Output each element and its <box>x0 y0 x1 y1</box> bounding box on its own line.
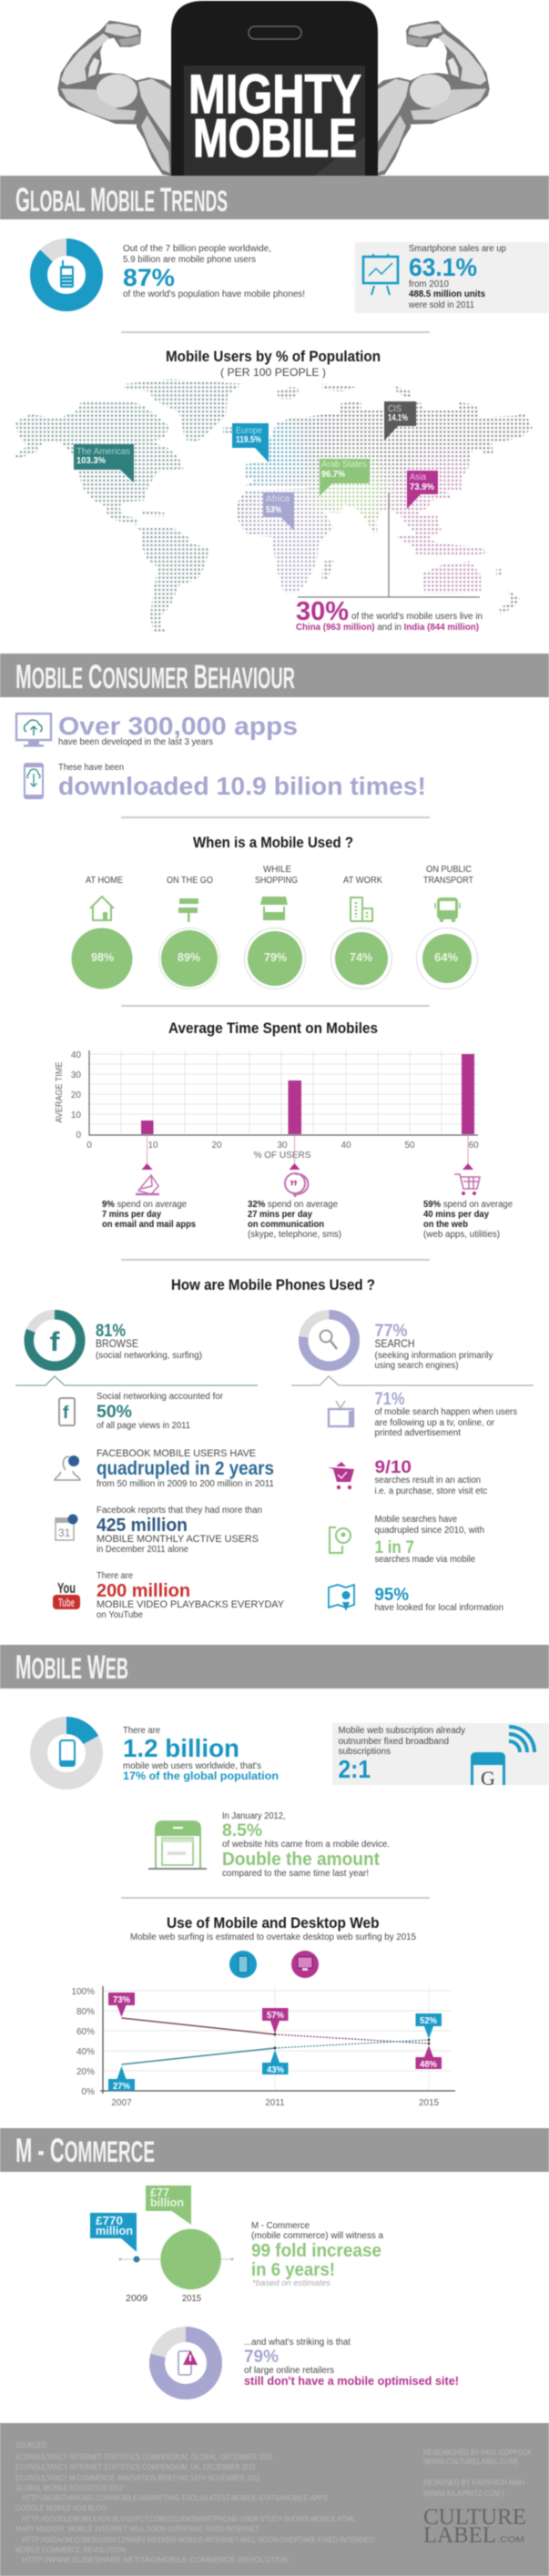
heading: use of mobile and desktop web <box>130 1914 416 1942</box>
title <box>188 64 361 168</box>
callout: Asia: 73.9% <box>410 482 434 492</box>
heading: use of mobile and desktop web: Mobile web surfing is estimated to overtake desktop web surfing by 2015 <box>130 1932 416 1942</box>
panel: usage locations <box>71 864 477 989</box>
callout: CIS <box>384 401 416 441</box>
timeline: 2009 <box>126 2293 147 2304</box>
callout: Arab States: Arab States <box>321 460 367 470</box>
x axis labels: 2015 <box>419 2098 440 2108</box>
icon: presentation chart <box>363 254 398 295</box>
stat text: of website hits came from a mobile device. <box>222 1840 390 1850</box>
icon: left flexed arm <box>57 21 171 176</box>
callout: 77 billion: billion <box>150 2196 184 2209</box>
y axis labels: 80% <box>76 2007 95 2017</box>
stat text: compared to the same time last year! <box>222 1869 369 1879</box>
caption: 32% spend on average <box>248 1200 338 1210</box>
column: on public transport: TRANSPORT <box>423 875 473 886</box>
item: 1 in 7 searches: quadrupled since 2010, with <box>375 1526 484 1536</box>
y axis labels: 20 <box>71 1090 81 1100</box>
sources list: SOURCES: <box>15 2441 47 2449</box>
dotted world map <box>15 379 534 633</box>
icon: shopping cart <box>454 1174 480 1195</box>
stat text: 488.5 million units <box>409 289 485 299</box>
item: 95% local information <box>329 1585 503 1613</box>
sources list: ECONSULTANCY INTERNET STATISTICS COMPENDIUM, UK, DECEMBER 2011 <box>15 2463 256 2471</box>
item: 71% tv: 71% <box>375 1390 405 1409</box>
caption: (web apps, utilities) <box>423 1230 500 1240</box>
caption: 40 mins per day <box>423 1210 489 1220</box>
credits: RESEARCHED BY PAUL COPPOCK <box>423 2449 533 2457</box>
panel: email usage <box>102 1136 196 1230</box>
stat text: were sold in 2011 <box>408 300 474 310</box>
y axis labels: 100% <box>71 1987 95 1997</box>
caption <box>248 1200 341 1240</box>
callout: 73%: 73% <box>113 1995 130 2005</box>
stat text: In January 2012, <box>222 1811 286 1821</box>
donut chart: 79% <box>157 2334 215 2392</box>
stat text: 17% of the global population <box>123 1771 279 1782</box>
x axis labels: 2007 <box>111 2098 132 2108</box>
column: while shopping <box>244 864 306 989</box>
phone body <box>171 1 378 176</box>
credits <box>423 2449 533 2498</box>
footer <box>0 2423 549 2576</box>
caption: on the web <box>423 1220 468 1230</box>
stat text: There are <box>123 1726 160 1736</box>
item: 425 million: MOBILE MONTHLY ACTIVE USERS <box>97 1534 259 1545</box>
callout: 57% <box>262 2008 288 2033</box>
column: while shopping: SHOPPING <box>255 875 298 886</box>
panel: web usage <box>423 1136 513 1240</box>
heading: use of mobile and desktop web: Use of Mobile and Desktop Web <box>167 1914 379 1932</box>
item: 1 in 7 searches: searches made via mobile <box>375 1555 475 1565</box>
callout: Europe: Europe <box>236 426 262 436</box>
callout: The Americas: The Americas <box>76 447 130 457</box>
caption: 59% spend on average <box>423 1200 513 1210</box>
callout: Arab States <box>320 459 370 496</box>
item: 200 million youtube: 200 million <box>97 1581 190 1601</box>
item: 425 million: Facebook reports that they had more than <box>97 1506 262 1516</box>
stat: browse <box>96 1322 202 1361</box>
stat text: outnumber fixed broadband <box>339 1737 449 1747</box>
stat: search: SEARCH <box>375 1337 415 1350</box>
stat text: ...and what's striking is that <box>244 2338 351 2348</box>
donut chart: 81% browse: f <box>49 1327 61 1357</box>
column: on public transport <box>417 864 477 989</box>
stat text: 8.5% <box>222 1821 262 1841</box>
y axis labels: 10 <box>71 1111 81 1121</box>
caption: 7 mins per day <box>102 1210 161 1220</box>
sources list <box>15 2441 376 2564</box>
credits: DESIGNED BY FARSHIDH MAH <box>423 2479 524 2487</box>
column: at work <box>331 875 391 989</box>
panel: 1.2 billion web users <box>38 1726 279 1782</box>
stat text: 63.1% <box>409 253 477 281</box>
stat text: 2:1 <box>339 1755 371 1783</box>
y axis labels: 40 <box>71 1050 81 1060</box>
item: 95% local information: have looked for local information <box>375 1603 503 1613</box>
caption: on communication <box>248 1220 324 1230</box>
item: 71% tv: of mobile search happen when users <box>375 1407 517 1417</box>
callout: Europe: 119.5% <box>236 435 261 445</box>
stat text: Double the amount <box>222 1850 380 1870</box>
column: on the go <box>158 875 220 989</box>
item: 200 million youtube <box>53 1571 285 1620</box>
item: 1 in 7 searches: Mobile searches have <box>375 1515 457 1525</box>
callout: Europe <box>232 423 269 462</box>
callout: 770 million: £770 <box>96 2214 123 2227</box>
callout: Africa <box>263 492 294 531</box>
divider with notch <box>15 1376 258 1385</box>
panel: 79% retailers <box>157 2334 459 2392</box>
bar chart: average time spent on mobiles <box>55 1050 479 1161</box>
callout: 52% <box>415 2013 442 2039</box>
y axis labels <box>71 1987 95 2097</box>
stat text: subscriptions <box>339 1747 391 1757</box>
credits: (WWW.CULTURELABEL.COM) <box>423 2458 518 2466</box>
callout: 48%: 48% <box>420 2060 437 2070</box>
panel: smartphone sales <box>355 242 549 313</box>
stat text: 79% <box>244 2348 279 2367</box>
x axis labels: 0 <box>86 1141 92 1151</box>
x axis labels <box>111 2098 440 2108</box>
panel: communication usage <box>248 1136 341 1240</box>
sources list: ECONSULTANCY INTERNET STATISTICS COMPENDIUM, GLOBAL, DECEMBER 2011 <box>15 2453 273 2461</box>
stat text: in 6 years! <box>251 2260 335 2280</box>
donut chart: 17% <box>38 1726 95 1780</box>
timeline: 2015 <box>182 2293 201 2304</box>
section bar: Mobile Consumer Behaviour <box>0 654 549 697</box>
stat: search <box>375 1322 493 1371</box>
sources list: MOBILE COMMERCE REVOLUTION <box>15 2546 126 2554</box>
stat text: Out of the 7 billion people worldwide, <box>123 244 271 254</box>
callout: 43% <box>262 2050 288 2075</box>
panel: 10.9 billion downloads <box>24 763 426 800</box>
item: quadrupled in 2 years <box>55 1448 274 1489</box>
item: quadrupled in 2 years: quadrupled in 2 years <box>97 1458 274 1479</box>
callout: 43%: 43% <box>267 2065 284 2075</box>
callout: The Americas <box>74 444 134 482</box>
x axis labels: 10 <box>147 1141 158 1151</box>
panel: 8.5% website hits <box>148 1811 390 1879</box>
icon: phone with cloud download <box>24 763 44 799</box>
stat text: (mobile commerce) will witness a <box>251 2231 383 2241</box>
sources list: ECONSULTANCY M-COMMERCE INNOVATION BRIEFING 16TH NOVEMBER 2011 <box>15 2474 260 2482</box>
x axis labels: 60 <box>468 1141 479 1151</box>
section bar: M-Commerce <box>0 2128 549 2172</box>
donut chart: 77% search <box>303 1314 355 1366</box>
stat text <box>222 1811 390 1879</box>
panel: 87% population stat <box>38 244 305 302</box>
item: social networking 50% <box>59 1392 224 1431</box>
bars <box>141 1054 474 1134</box>
x axis labels: 2011 <box>265 2098 285 2108</box>
panel: browse column <box>15 1314 285 1620</box>
callout: CIS: 14.1% <box>388 413 408 423</box>
panel: subscriptions 2:1 <box>332 1723 549 1790</box>
desktop line <box>122 2018 430 2044</box>
item: social networking 50%: 50% <box>97 1403 132 1422</box>
callout: 30% live in China and India: 30% <box>296 597 349 626</box>
callout: 77 billion <box>146 2186 191 2225</box>
callout: 52%: 52% <box>420 2016 437 2026</box>
stat text: still don't have a mobile optimised site! <box>244 2374 459 2388</box>
item: social networking 50%: of all page views in 2011 <box>97 1421 190 1431</box>
callout: 30% live in China and India: of the world's mobile users live in <box>351 612 483 622</box>
item: 71% tv <box>329 1390 517 1438</box>
section bar: M-Commerce: M - COMMERCE <box>15 2132 155 2169</box>
callout: 30% live in China and India: China (963 million) and in India (844 million) <box>296 623 479 633</box>
caption: (skype, telephone, sms) <box>248 1230 341 1240</box>
caption: 27 mins per day <box>248 1210 312 1220</box>
callout: 770 million: million <box>96 2224 133 2237</box>
item: 200 million youtube: MOBILE VIDEO PLAYBACKS EVERYDAY <box>97 1599 285 1610</box>
x axis labels <box>86 1141 479 1161</box>
column: while shopping: WHILE <box>263 864 291 875</box>
caption <box>102 1200 196 1230</box>
icon: desktop legend <box>291 1951 319 1978</box>
sources list: HTTP://MOBITHINKING.COM/MOBILE-MARKETING-TOOLS/LATEST-MOBILE-STATS#MOBILE-APPS <box>22 2494 328 2502</box>
stat text: of large online retailers <box>244 2366 334 2376</box>
panel: 300,000 apps <box>16 712 298 747</box>
column: while shopping: 79% <box>264 950 287 964</box>
callout: Arab States: 96.7% <box>321 470 345 480</box>
column: at work: 74% <box>350 950 372 964</box>
callout: 48% <box>415 2045 442 2070</box>
item: 71% tv: printed advertisement <box>375 1428 461 1438</box>
item: quadrupled in 2 years: FACEBOOK MOBILE USERS HAVE <box>97 1448 256 1459</box>
title: MOBILE <box>193 108 357 168</box>
stat text: Mobile web subscription already <box>339 1726 465 1736</box>
column: at home: 98% <box>91 950 114 964</box>
item: 425 million: in December 2011 alone <box>97 1545 188 1555</box>
stat text: These have been <box>58 763 124 773</box>
callout: 77 billion: £77 <box>150 2186 169 2199</box>
stat text <box>123 244 305 299</box>
stat text: *based on estimates <box>252 2278 330 2288</box>
item: 200 million youtube: There are <box>97 1571 133 1581</box>
heading: how are mobile phones used: How are Mobile Phones Used ? <box>171 1276 375 1293</box>
stat text: 99 fold increase <box>251 2241 381 2261</box>
stat text: Over 300,000 apps <box>58 712 298 740</box>
item: social networking 50%: f <box>63 1404 69 1423</box>
callout: The Americas: 103.3% <box>76 456 106 466</box>
icon: green mobile browser <box>148 1821 207 1870</box>
line chart: mobile vs desktop web <box>71 1986 455 2108</box>
stat: browse: 81% <box>96 1322 126 1341</box>
stat: search: (seeking information primarily <box>375 1351 493 1361</box>
callout: 27%: 27% <box>113 2082 130 2092</box>
item: 1 in 7 searches <box>330 1515 484 1565</box>
y axis labels: 60% <box>76 2027 95 2037</box>
panel: m-commerce growth <box>90 2186 383 2304</box>
column: on public transport: ON PUBLIC <box>426 864 472 875</box>
sources list: MARY MEEKER: MOBILE INTERNET WILL SOON OVERTAKE FIXED INTERNET <box>15 2525 259 2533</box>
icon: wifi phone <box>471 1727 534 1790</box>
section bar: Mobile Web: MOBILE WEB <box>15 1648 128 1686</box>
item: 200 million youtube: You <box>57 1581 76 1597</box>
stat text: 87% <box>123 264 175 291</box>
donut chart: 81% browse <box>29 1314 80 1366</box>
heading: when is a mobile used: When is a Mobile Used ? <box>193 834 353 851</box>
icon: email <box>136 1175 159 1194</box>
sources list: GLOBAL MOBILE STATISTICS 2012 <box>15 2484 123 2492</box>
icon: right flexed arm <box>376 21 490 176</box>
stat: search: 77% <box>375 1322 408 1341</box>
column: on public transport: 64% <box>434 950 458 964</box>
sources list: GOOGLE MOBILE ADS BLOG <box>15 2504 107 2512</box>
callout: Africa: 53% <box>266 505 281 515</box>
y axis labels <box>71 1050 81 1141</box>
item: 9/10 cart: 9/10 <box>375 1458 412 1477</box>
stat text: 1.2 billion <box>123 1734 239 1762</box>
x axis labels: 50 <box>404 1141 415 1151</box>
callout: 57%: 57% <box>267 2011 284 2021</box>
heading: mobile users by population: Mobile Users by % of Population <box>166 348 381 365</box>
item: 9/10 cart: i.e. a purchase, store visit etc <box>375 1486 487 1496</box>
stat text: 5.9 billion are mobile phone users <box>123 255 256 265</box>
section bar: Global Mobile Trends: GLOBAL MOBILE TRENDS <box>15 181 228 218</box>
item: 71% tv: are following up a tv, online, or <box>375 1418 495 1428</box>
stat text <box>123 1726 279 1782</box>
stat: browse: (social networking, surfing) <box>96 1351 202 1361</box>
map dots <box>15 379 534 632</box>
y axis labels: 30 <box>71 1070 81 1080</box>
sources list: HTTP://WWW.SLIDESHARE.NET/TAG/MOBILE-COMMERCE-REVOLUTION <box>22 2556 289 2564</box>
stat text: of the world's population have mobile phones! <box>123 289 305 299</box>
callout: 73% <box>108 1993 135 2017</box>
section bar: Mobile Web <box>0 1645 549 1689</box>
divider with notch <box>291 1376 534 1385</box>
donut chart: 87% <box>38 248 95 302</box>
logo: Culture Label: .COM <box>497 2535 524 2544</box>
stat text <box>244 2338 459 2388</box>
mobile line <box>122 2039 430 2064</box>
y axis labels: 40% <box>76 2047 95 2057</box>
heading: mobile users by population <box>166 348 381 379</box>
stat text: from 2010 <box>409 279 449 289</box>
section bar: Global Mobile Trends <box>0 176 549 219</box>
stat text: Smartphone sales are up <box>409 244 506 254</box>
icon: wifi phone: G <box>481 1767 495 1790</box>
logo: Culture Label: CULTURE <box>423 2505 526 2530</box>
item: 425 million: 31 <box>58 1526 71 1539</box>
heading: mobile users by population: ( PER 100 PEOPLE ) <box>220 366 326 379</box>
callout: Africa: Africa <box>266 494 290 504</box>
item: social networking 50%: Social networking accounted for <box>97 1392 224 1402</box>
stat text: M - Commerce <box>251 2221 310 2231</box>
stat text <box>339 1726 465 1783</box>
sources list: HTTP://GIGAOM.COM/2010/04/12/MARY-MEEKER-MOBILE-INTERNET-WILL-SOON-OVERTAKE-FIXED-INTERNET/ <box>22 2536 376 2544</box>
logo: Culture Label: LABEL <box>423 2523 496 2548</box>
item: 200 million youtube: on YouTube <box>97 1610 143 1620</box>
item: 425 million <box>56 1506 262 1555</box>
stat text: mobile web users worldwide, that's <box>123 1761 261 1771</box>
logo: Culture Label <box>423 2505 526 2548</box>
item: 425 million: 425 million <box>97 1516 188 1536</box>
callout: 27% <box>108 2066 135 2092</box>
y axis labels: 0% <box>82 2087 95 2097</box>
timeline <box>118 2229 233 2304</box>
header illustration: flexing phone <box>57 1 490 176</box>
x axis labels: 20 <box>211 1141 222 1151</box>
y axis labels: 0 <box>76 1131 81 1141</box>
caption: on email and mail apps <box>102 1220 196 1230</box>
callout: Asia: Asia <box>410 472 426 482</box>
column: on the go: 89% <box>178 950 200 964</box>
callout: Asia <box>407 471 438 509</box>
item: 95% local information: 95% <box>375 1586 409 1605</box>
stat: search: using search engines) <box>375 1361 459 1371</box>
x axis labels: 40 <box>341 1141 351 1151</box>
y axis labels: 20% <box>76 2067 95 2077</box>
icon: mobile legend <box>229 1951 257 1978</box>
column: at work: AT WORK <box>343 875 382 886</box>
item: 9/10 cart <box>328 1458 487 1496</box>
heading: average time spent: Average Time Spent on Mobiles <box>168 1019 378 1037</box>
credits: (WWW.KILAPRITZ.COM ) <box>423 2490 504 2498</box>
item: 200 million youtube: Tube <box>58 1596 75 1609</box>
icon: speech bubble: ” <box>290 1178 298 1196</box>
item: 9/10 cart: searches result in an action <box>375 1476 481 1486</box>
column: at home: AT HOME <box>86 875 123 886</box>
y axis title: AVERAGE TIME <box>55 1061 65 1123</box>
stat text <box>251 2221 383 2288</box>
caption: 9% spend on average <box>102 1200 187 1210</box>
callout: 770 million <box>90 2213 137 2252</box>
panel: search column <box>291 1314 534 1613</box>
pointer: China and India <box>298 493 480 597</box>
sources list: HTTP://GOOGLEMOBILEADS.BLOGSPOT.COM/2011/04/SMARTPHONE-USER-STUDY-SHOWS-MOBILE.HTML <box>22 2515 355 2523</box>
stat: browse: BROWSE <box>96 1337 138 1350</box>
stat text: downloaded 10.9 bilion times! <box>58 772 426 800</box>
item: 1 in 7 searches: 1 in 7 <box>375 1538 414 1557</box>
stat text <box>408 244 506 310</box>
title: MIGHTY <box>188 64 361 125</box>
icon: monitor with cloud upload <box>16 714 51 746</box>
item: quadrupled in 2 years: from 50 million in 2009 to 200 million in 2011 <box>97 1479 274 1489</box>
column: at home <box>71 875 133 989</box>
x axis labels: 30 <box>277 1141 288 1151</box>
callout: 30% live in China and India <box>296 597 483 633</box>
section bar: Mobile Consumer Behaviour: MOBILE CONSUMER BEHAVIOUR <box>15 658 295 695</box>
x axis labels: % OF USERS <box>254 1151 311 1161</box>
caption <box>423 1200 513 1240</box>
callout: CIS: CIS <box>388 404 402 414</box>
stat text: have been developed in the last 3 years <box>58 737 213 747</box>
column: on the go: ON THE GO <box>167 875 213 886</box>
